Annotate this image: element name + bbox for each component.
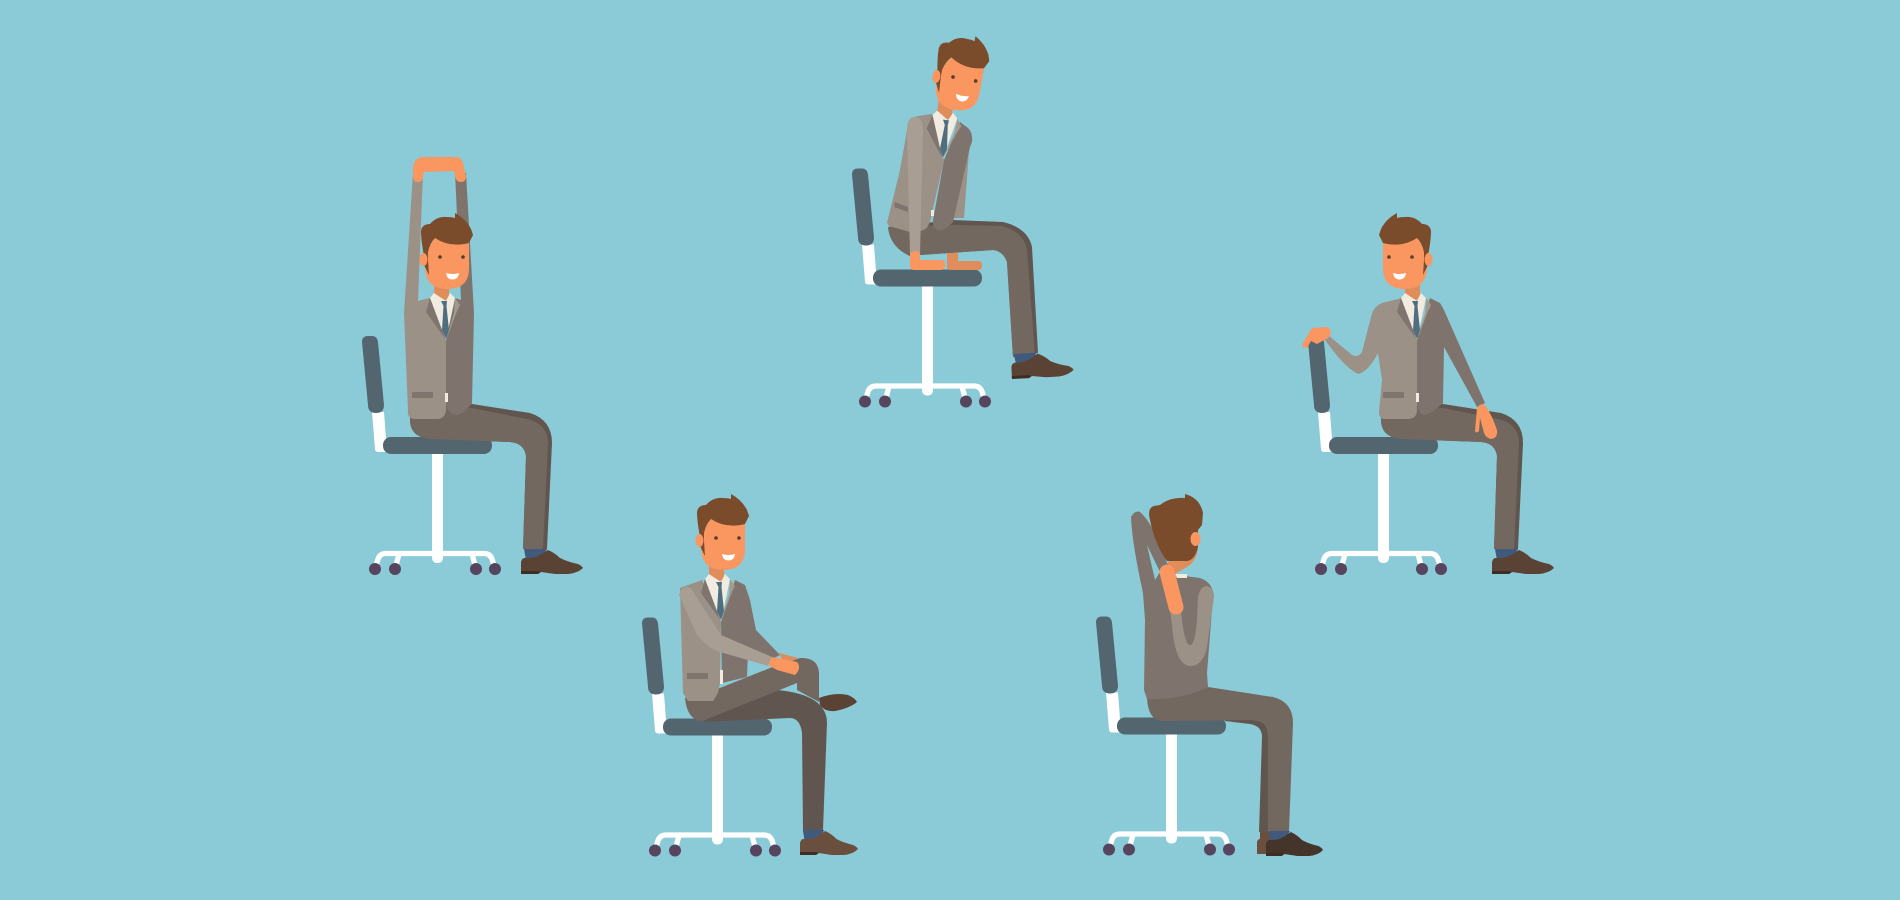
hand on knee (1475, 404, 1497, 439)
legs (410, 404, 552, 549)
jacket back and raised arm (1131, 512, 1213, 699)
shirt hem (720, 670, 723, 684)
raised leg (888, 220, 1038, 357)
jacket pocket (687, 673, 708, 679)
office chair (362, 336, 501, 575)
jacket right side (721, 580, 750, 683)
hair (1149, 494, 1203, 561)
figure: twist holding chair back (1302, 213, 1554, 575)
jacket right side and arm (1417, 298, 1485, 415)
far shoe (1257, 832, 1272, 854)
raised leg highlight (888, 225, 1035, 357)
office chair (642, 618, 781, 856)
near arm (679, 587, 772, 666)
near hand (768, 657, 799, 675)
crossed leg (685, 658, 819, 721)
figure: ankle crossed over knee (642, 494, 858, 856)
ear (1190, 532, 1200, 546)
collar and tie (923, 97, 965, 161)
far hand (779, 653, 798, 665)
raised shoe (819, 694, 857, 711)
near sleeve (1170, 586, 1214, 666)
far hand (947, 253, 982, 270)
jacket left side (680, 580, 721, 701)
head (1379, 213, 1432, 289)
jacket left side and arm (1325, 298, 1417, 419)
neck (1168, 547, 1198, 574)
shoe (1492, 549, 1554, 574)
jacket pocket (412, 392, 433, 398)
head (927, 30, 993, 114)
clasped hands (413, 157, 466, 182)
forearm and hand (1167, 572, 1176, 607)
shirt hem (445, 393, 448, 402)
near arm (907, 117, 923, 255)
office chair (1308, 336, 1447, 575)
jacket left side with raised arm (404, 173, 446, 419)
far lower leg (1225, 720, 1268, 832)
far arm and jacket (933, 122, 972, 230)
figure: arms stretched overhead (362, 157, 583, 575)
near leg (1147, 687, 1293, 832)
supporting leg (703, 685, 827, 830)
figure: arm behind head, viewed from behind (1096, 494, 1323, 856)
far arm (745, 600, 780, 660)
collar and tie (1397, 280, 1431, 340)
figure: knees raised, hands on seat (852, 30, 1074, 407)
office chair (852, 168, 991, 408)
shoe on floor (800, 830, 858, 855)
head (696, 494, 749, 570)
shoe (521, 549, 583, 574)
jacket right side with raised arm (446, 173, 474, 415)
jacket right back panel (953, 137, 970, 218)
jacket pocket (1383, 392, 1404, 398)
shirt hem (1416, 393, 1419, 402)
jacket pocket (894, 202, 908, 212)
head (420, 213, 473, 289)
collar and tie (426, 280, 460, 340)
jacket front panel (887, 114, 944, 232)
office chair (1096, 616, 1235, 856)
collar and tie (701, 561, 735, 621)
shoe (1011, 351, 1074, 379)
legs (1381, 404, 1523, 549)
gap between arm and head (1147, 545, 1160, 580)
shirt hem (931, 210, 934, 216)
hand on chair back (1302, 327, 1331, 348)
near hand (910, 251, 945, 270)
near shoe (1266, 831, 1323, 856)
collar (1175, 574, 1187, 578)
